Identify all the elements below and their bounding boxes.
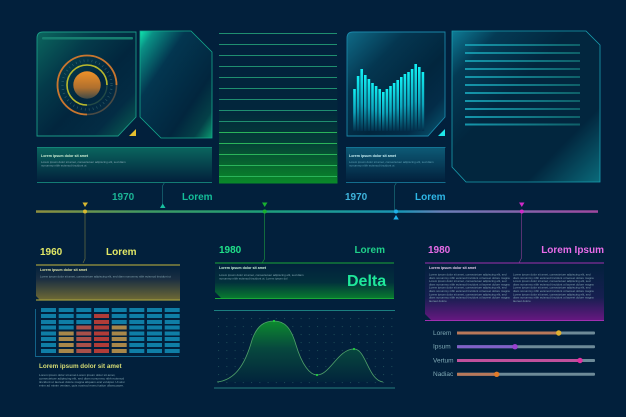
text block: Delta card: [215, 263, 394, 298]
left text column: Lorem ipsum dolor sit amet, consectetuer adipiscing elit, sed: [429, 286, 507, 290]
text block: lorem ipsum paragraph: [39, 363, 125, 388]
sliders: Ipsum: [433, 344, 451, 350]
heading: Delta: Delta: [347, 273, 386, 290]
text block: second caption: nonummy nibh euismod tincidunt ut: [349, 164, 395, 168]
heading: Lorem blue: Lorem: [415, 192, 446, 203]
heading: 1970 blue: 1970: [345, 192, 368, 203]
icon: cyan corner triangle: [438, 129, 445, 136]
icon: radial gauge: [57, 56, 116, 114]
line chart: [214, 310, 395, 388]
text block: yellow caption: Lorem ipsum dolor sit amet: [40, 268, 88, 272]
text block: first caption: [37, 148, 212, 182]
left text column: Lorem ipsum dolor sit amet, consectetuer adipiscing elit, sed: [429, 272, 507, 276]
marker: magenta: [519, 202, 524, 214]
sliders: Nadiac: [433, 371, 454, 378]
panel: gauge: [37, 32, 136, 136]
text block: second caption: [346, 148, 446, 182]
panel: text lines card: [452, 31, 600, 182]
left text column: Lorem ipsum dolor sit amet, consectetuer adipiscing elit, sed: [429, 279, 507, 283]
heading: 1970 green: 1970: [112, 192, 135, 203]
left text column: diam nonummy nibh euismod tincidunt ut laoreet dolore magna: [429, 289, 510, 293]
timeline: [36, 182, 598, 263]
bar chart: [353, 64, 424, 131]
left text column: Lorem ipsum dolor sit amet, consectetuer adipiscing elit, sed: [429, 292, 507, 296]
heading: Lorem green right: Lorem: [354, 245, 385, 256]
right text column: diam nonummy nibh euismod tincidunt ut laoreet dolore magna: [513, 282, 594, 286]
left text column: [429, 272, 510, 303]
panel: bar chart: [347, 32, 445, 136]
text block: lorem ipsum paragraph: Lorem ipsum dolor sit amet: [39, 363, 122, 370]
heading: 1980 magenta: 1980: [428, 245, 451, 256]
right text column: laoreet dolore: [513, 299, 531, 303]
right text column: diam nonummy nibh euismod tincidunt ut laoreet dolore magna: [513, 296, 594, 300]
text block: first caption: Lorem ipsum dolor sit amet: [41, 154, 89, 158]
right text column: Lorem ipsum dolor sit amet, consectetuer adipiscing elit, sed: [513, 292, 591, 296]
text block: first caption: nonummy nibh euismod tincidunt ut: [41, 164, 87, 168]
stripes panel: [219, 33, 338, 184]
text block: second caption: Lorem ipsum dolor sit amet, consectetuer adipiscing elit, sed diam: [349, 160, 434, 164]
right text column: Lorem ipsum dolor sit amet, consectetuer adipiscing elit, sed: [513, 286, 591, 290]
left text column: laoreet dolore: [429, 299, 447, 303]
text line bars: [465, 44, 580, 126]
sliders: Lorem: [433, 330, 451, 337]
heading: Lorem yellow: Lorem: [106, 247, 137, 258]
marker: blue: [393, 210, 399, 220]
heading: Lorem green: Lorem: [182, 192, 213, 203]
right text column: Lorem ipsum dolor sit amet, consectetuer adipiscing elit, sed: [513, 272, 591, 276]
right text column: diam nonummy nibh euismod tincidunt ut laoreet dolore magna: [513, 276, 594, 280]
text block: lorem ipsum paragraph: Lorem ipsum dolor sit amet.Lorem ipsum dolor sit amet,: [39, 373, 115, 377]
right text column: Lorem ipsum dolor sit amet, consectetuer adipiscing elit, sed: [513, 279, 591, 283]
text block: purple card: Lorem ipsum dolor sit amet: [429, 266, 477, 270]
heading: 1960: 1960: [40, 247, 63, 258]
text block: lorem ipsum paragraph: tincidunt ut laoreet dolore magna aliquam erat volutpat. Ut wisi: [39, 380, 125, 384]
sliders: [433, 330, 595, 378]
text block: second caption: Lorem ipsum dolor sit amet: [349, 154, 397, 158]
marker: green: [262, 202, 268, 214]
heading: 1980 green: 1980: [219, 245, 242, 256]
text block: yellow caption: Lorem ipsum dolor sit amet, consectetuer adipiscing elit, sed diam nonummy nibh euismod tincidunt ut: [40, 274, 171, 278]
text block: Delta card: Lorem ipsum dolor sit amet: [219, 266, 267, 270]
left text column: diam nonummy nibh euismod tincidunt ut laoreet dolore magna: [429, 276, 510, 280]
left text column: diam nonummy nibh euismod tincidunt ut laoreet dolore magna: [429, 282, 510, 286]
right text column: diam nonummy nibh euismod tincidunt ut laoreet dolore magna: [513, 289, 594, 293]
icon: yellow corner triangle: [129, 129, 136, 136]
sliders: Vertum: [433, 358, 454, 364]
equalizer chart: [36, 308, 180, 356]
panel: glow card: [140, 31, 212, 138]
heading: Lorem Ipsum: Lorem Ipsum: [541, 245, 604, 256]
text block: Delta card: nonummy nibh euismod tincidunt ut. Lorem ipsum dol: [219, 276, 288, 280]
marker: yellow: [82, 202, 88, 214]
text block: first caption: Lorem ipsum dolor sit amet, consectetuer adipiscing elit, sed diam: [41, 160, 126, 164]
text block: lorem ipsum paragraph: enim ad minim veniam, quis nostrud exerci tation ullamcorper.: [39, 384, 124, 388]
left text column: diam nonummy nibh euismod tincidunt ut laoreet dolore magna: [429, 296, 510, 300]
text block: Delta card: Lorem ipsum dolor sit amet, consectetuer adipiscing elit, sed diam: [219, 273, 304, 277]
right text column: [513, 272, 594, 303]
text block: yellow caption: [36, 265, 180, 300]
text block: purple card: [425, 263, 604, 320]
marker: teal: [160, 204, 166, 208]
text block: lorem ipsum paragraph: consectetuer adipiscing elit, sed diam nonummy nibh euismod: [39, 376, 124, 380]
